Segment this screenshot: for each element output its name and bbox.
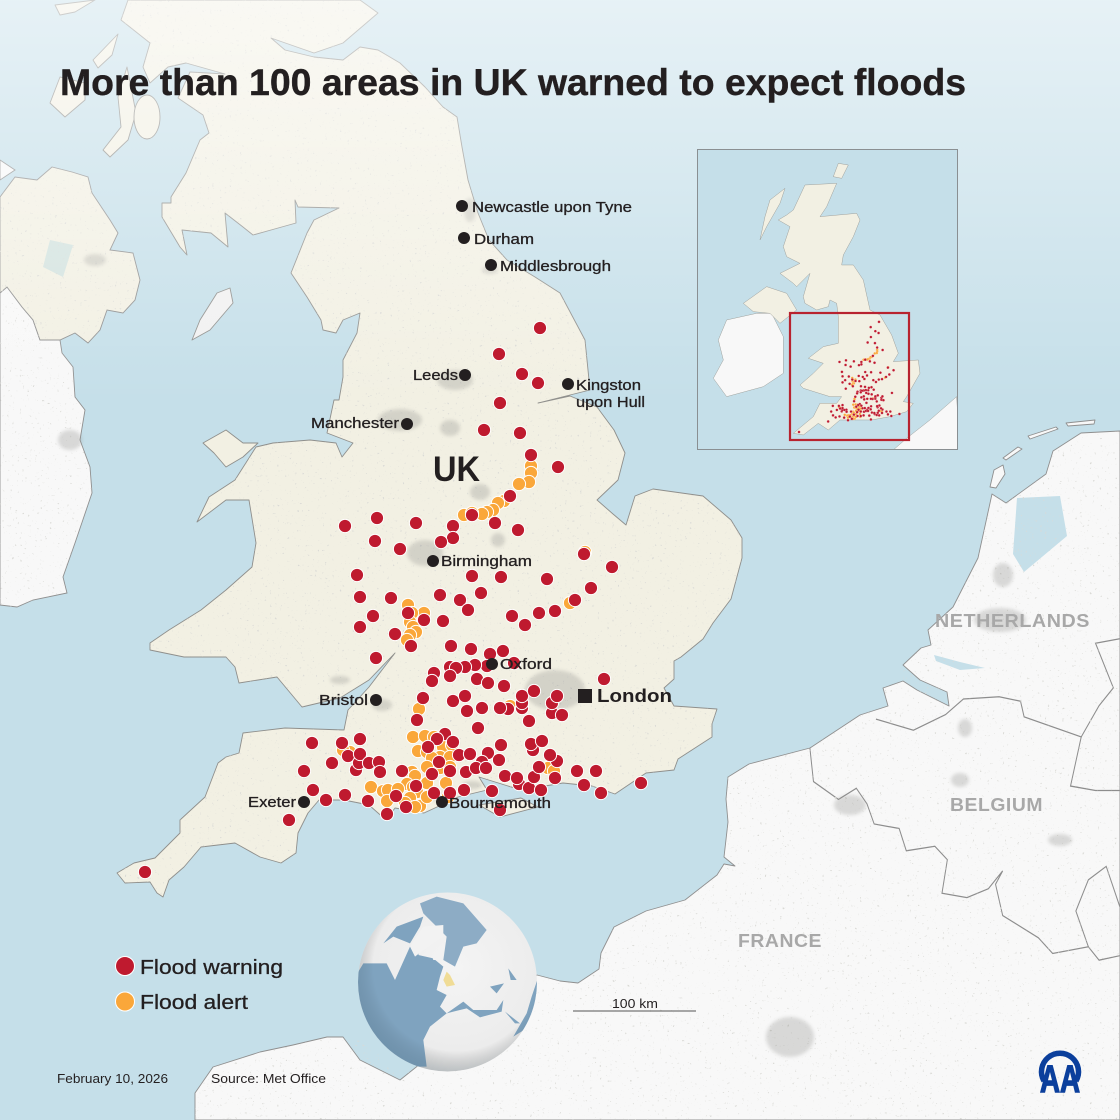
- city: Exeter: [248, 795, 310, 811]
- footer: date: February 10, 2026: [57, 1072, 168, 1086]
- map: Northern Ireland: [0, 167, 140, 343]
- globe: UK highlight: [443, 972, 455, 987]
- footer: source: Source: Met Office: [211, 1072, 326, 1086]
- scale bar: 100 km: [612, 997, 658, 1011]
- legend: [116, 956, 283, 1014]
- country label: Netherlands: NETHERLANDS: [935, 611, 1090, 631]
- city: Kingston upon Hull: [562, 378, 645, 411]
- city: Bournemouth: Bournemouth: [449, 796, 551, 812]
- city: London: London: [597, 686, 672, 706]
- map: Lough Neagh: [43, 240, 73, 277]
- city: Middlesbrough: Middlesbrough: [500, 259, 611, 275]
- city: Manchester: Manchester: [311, 416, 399, 432]
- inset: British Isles land: [713, 163, 960, 453]
- top fade overlay: [0, 0, 1120, 400]
- legend: flood warning: Flood warning: [140, 957, 283, 979]
- logo: Anadolu Agency: AA: [1040, 1059, 1080, 1101]
- city: Oxford: Oxford: [500, 657, 552, 673]
- legend: flood alert: Flood alert: [140, 992, 248, 1014]
- globe locator: [353, 892, 540, 1072]
- scale bar: [573, 997, 696, 1011]
- city: Leeds: [413, 368, 471, 384]
- city: Birmingham: Birmingham: [441, 554, 532, 570]
- globe: oceans: [353, 897, 540, 1067]
- inset: frame: [698, 150, 958, 450]
- title: More than 100 areas in UK warned to expect floods: [60, 62, 966, 103]
- city: Leeds: Leeds: [413, 368, 458, 384]
- city: Durham: Durham: [474, 232, 534, 248]
- inset: red extent rectangle: [790, 313, 909, 440]
- city: Kingston upon Hull: upon Hull: [576, 395, 645, 411]
- city: Bristol: [319, 693, 382, 709]
- logo: Anadolu Agency: [1040, 1053, 1080, 1101]
- city: Durham: [458, 232, 534, 248]
- flood alert markers: [336, 459, 592, 814]
- city labels: [248, 200, 672, 812]
- map: Donegal tip: [0, 160, 15, 180]
- map: country borders: [810, 639, 1120, 960]
- globe: Greenland and Iceland: [410, 925, 443, 960]
- inset locator map: [697, 149, 960, 453]
- country label: Belgium: BELGIUM: [950, 795, 1043, 815]
- country label: UK: UK: [433, 450, 480, 489]
- city: Bristol: Bristol: [319, 693, 368, 709]
- flood warning markers: [138, 321, 648, 879]
- city: Oxford: [486, 657, 552, 673]
- inset: flood markers: [798, 321, 901, 433]
- map: Great Britain: [50, 0, 742, 897]
- country label: France: FRANCE: [738, 931, 822, 951]
- city: Newcastle upon Tyne: Newcastle upon Tyne: [472, 200, 632, 216]
- city: Exeter: Exeter: [248, 795, 296, 811]
- map: continental Europe (France, Belgium, Netherlands): [195, 420, 1120, 1120]
- map: Ireland: [0, 287, 92, 607]
- city: Kingston upon Hull: Kingston: [576, 378, 641, 394]
